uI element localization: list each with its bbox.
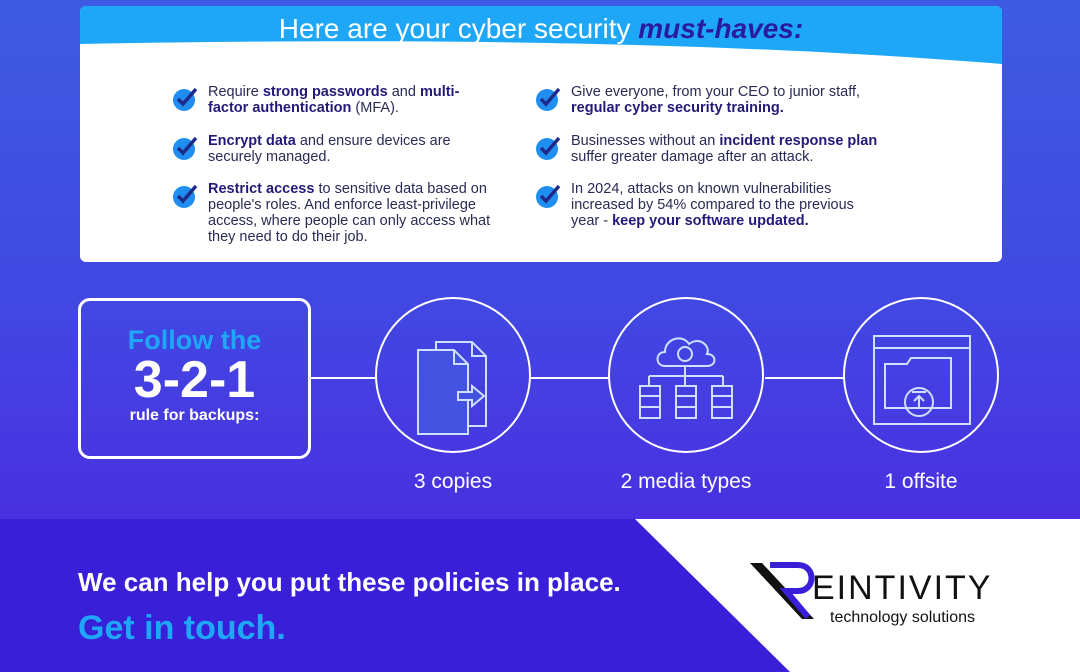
title: Here are your cyber security must-haves:: [279, 13, 803, 44]
label: 2 media types: 2 media types: [621, 470, 751, 493]
logo: [750, 562, 992, 626]
box: 3-2-1 rule: rule for backups:: [130, 407, 259, 424]
panel: must-haves: [80, 6, 1002, 262]
logo: technology solutions: [830, 609, 975, 626]
connector lines: [311, 377, 843, 379]
footer band: Get in touch.: [78, 609, 286, 647]
checklist right 3: In 2024, attacks on known vulnerabilities increased by 54% compared to the previous year - keep your software updated.: [571, 181, 854, 229]
footer band: [0, 519, 1080, 672]
checklist right 1: Give everyone, from your CEO to junior staff, regular cyber security training.: [571, 84, 860, 116]
icon: media types circle: [608, 297, 764, 453]
call to action: We can help you put these policies in place.: [78, 567, 621, 597]
header band: [80, 6, 1002, 64]
box: 3-2-1 rule: Follow the: [128, 325, 261, 355]
label: 3 copies: 3 copies: [414, 470, 492, 493]
checklist right 2: Businesses without an incident response plan suffer greater damage after an attack.: [571, 133, 877, 165]
checklist left 2: Encrypt data and ensure devices are securely managed.: [208, 133, 451, 165]
box: 3-2-1 rule: 3-2-1: [134, 351, 255, 409]
checklist left 1: Require strong passwords and multi-factor authentication (MFA).: [208, 84, 459, 116]
icon: copies circle: [375, 297, 531, 453]
logo: EINTIVITY: [812, 569, 992, 607]
checklist left 3: Restrict access to sensitive data based on people's roles. And enforce least-privilege access, where people can only access what they need to do their job.: [208, 181, 490, 245]
icon: offsite circle: [843, 297, 999, 453]
box: 3-2-1 rule: [78, 298, 311, 459]
label: 1 offsite: 1 offsite: [884, 470, 958, 493]
